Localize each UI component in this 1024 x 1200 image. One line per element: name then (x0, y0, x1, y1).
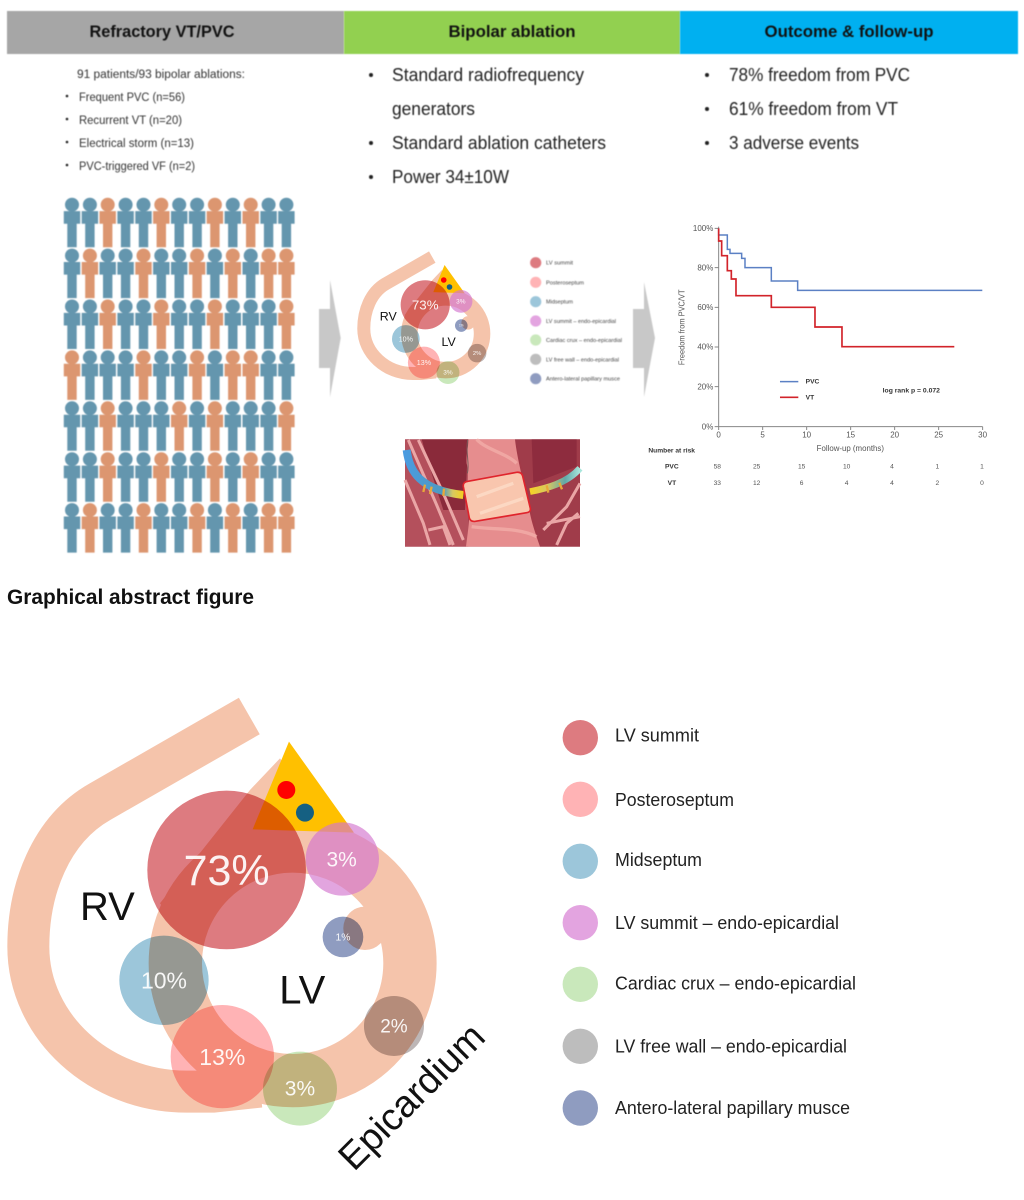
text block: patient population: Frequent PVC (n=56) (79, 92, 185, 104)
large legend: LV summit (615, 726, 699, 746)
header: Refractory VT/PVC (7, 11, 344, 54)
small legend: Cardiac crux – endo-epicardial (546, 338, 622, 344)
Kaplan-Meier chart: Follow-up (months) (817, 444, 884, 453)
text block: ablation details: Standard ablation catheters (392, 133, 606, 153)
Kaplan-Meier chart: VT (806, 395, 814, 402)
Kaplan-Meier chart: 80% (697, 263, 713, 272)
Kaplan-Meier chart: 10 (802, 430, 812, 439)
large legend: Cardiac crux – endo-epicardial (615, 974, 856, 994)
Kaplan-Meier chart: 30 (978, 430, 988, 439)
text block: outcomes (705, 65, 910, 153)
large legend: LV summit – endo-epicardial (615, 913, 839, 933)
small heart diagram: 3% (443, 370, 453, 377)
header: Bipolar ablation (344, 11, 680, 54)
pictogram: 91 patients (64, 198, 295, 553)
text block: ablation details (369, 65, 606, 187)
Kaplan-Meier chart: 12 (753, 480, 761, 487)
text block: patient population: Electrical storm (n=13) (79, 138, 194, 150)
large heart diagram: 10% (141, 967, 187, 993)
Kaplan-Meier chart: 5 (760, 430, 765, 439)
large heart diagram: 3% (285, 1078, 315, 1101)
Kaplan-Meier chart: PVC (665, 464, 679, 471)
large heart diagram: Epicardium (331, 1016, 493, 1179)
Kaplan-Meier chart: 2 (935, 480, 939, 487)
Kaplan-Meier chart: Freedom from PVC/VT (678, 289, 687, 365)
large heart diagram: 73% (184, 847, 270, 895)
arrow: population to ablation (319, 280, 341, 397)
text block: ablation details: Power 34±10W (392, 167, 509, 187)
illustration: bipolar catheters across septum (405, 439, 580, 547)
Kaplan-Meier chart: 0 (716, 430, 721, 439)
Kaplan-Meier chart (648, 224, 988, 487)
Kaplan-Meier chart: PVC (806, 379, 820, 386)
small legend: LV free wall – endo-epicardial (546, 357, 619, 363)
Kaplan-Meier chart: 33 (714, 480, 721, 487)
Kaplan-Meier chart: 4 (890, 480, 894, 487)
Kaplan-Meier chart: 4 (845, 480, 849, 487)
Kaplan-Meier chart: 20 (890, 430, 900, 439)
Kaplan-Meier chart: 25 (753, 464, 761, 471)
text block: patient population: 91 patients/93 bipolar ablations: (77, 69, 245, 81)
text block: ablation details: Standard radiofrequency (392, 65, 584, 85)
large heart diagram: RV (80, 885, 135, 929)
large heart diagram (28, 716, 493, 1179)
small heart diagram: 3% (456, 299, 466, 306)
Kaplan-Meier chart: 100% (693, 224, 713, 233)
header: Bipolar ablation: Bipolar ablation (448, 22, 576, 41)
small heart diagram: 1% (459, 324, 464, 328)
header: Outcome and follow-up (680, 11, 1018, 54)
small heart diagram (364, 257, 486, 384)
text block: patient population: PVC-triggered VF (n=2) (79, 161, 195, 173)
small heart diagram: 10% (399, 335, 414, 343)
small heart diagram: RV (380, 309, 398, 323)
Kaplan-Meier chart: 0% (702, 422, 713, 431)
header: Outcome and follow-up: Outcome & follow-up (764, 22, 934, 41)
small legend: Antero-lateral papillary musce (546, 377, 620, 383)
Kaplan-Meier chart: VT (668, 480, 676, 487)
text block: outcomes: 61% freedom from VT (729, 99, 898, 119)
caption: Graphical abstract figure: Graphical abstract figure (7, 586, 254, 609)
Kaplan-Meier chart: 58 (714, 464, 721, 471)
Kaplan-Meier chart: 15 (846, 430, 856, 439)
header: Refractory VT/PVC: Refractory VT/PVC (90, 22, 234, 41)
large legend: Midseptum (615, 850, 702, 870)
text block: ablation details: generators (392, 99, 475, 119)
large heart diagram: 1% (335, 933, 350, 944)
arrow: ablation to outcome (633, 282, 655, 397)
Kaplan-Meier chart: 15 (798, 464, 806, 471)
large heart diagram: 3% (326, 849, 357, 872)
Kaplan-Meier chart: log rank p = 0.072 (883, 387, 940, 394)
Kaplan-Meier chart: 6 (800, 480, 804, 487)
small legend: Posteroseptum (546, 280, 584, 286)
large legend: LV free wall – endo-epicardial (615, 1036, 847, 1056)
small heart diagram: 2% (473, 351, 482, 357)
large heart diagram: 13% (199, 1044, 245, 1070)
Kaplan-Meier chart: 20% (697, 382, 713, 391)
text block: patient population (66, 69, 245, 173)
Kaplan-Meier chart: 10 (843, 464, 851, 471)
large heart diagram: LV (279, 968, 326, 1012)
Kaplan-Meier chart: 25 (934, 430, 944, 439)
large legend: Posteroseptum (615, 790, 734, 810)
Kaplan-Meier chart: 40% (697, 343, 713, 352)
small legend: LV summit (546, 261, 573, 267)
small legend (530, 257, 622, 384)
text block: outcomes: 78% freedom from PVC (729, 65, 910, 85)
small legend: Midseptum (546, 300, 573, 306)
Kaplan-Meier chart: 60% (697, 303, 713, 312)
large heart diagram: 2% (380, 1016, 408, 1037)
small legend: LV summit – endo-epicardial (546, 319, 616, 325)
small heart diagram: 73% (412, 297, 439, 312)
text block: patient population: Recurrent VT (n=20) (79, 115, 182, 127)
small heart diagram: 13% (417, 359, 432, 367)
Kaplan-Meier chart: 4 (890, 464, 894, 471)
Kaplan-Meier chart: 0 (980, 480, 984, 487)
Kaplan-Meier chart: 1 (980, 464, 984, 471)
large legend (563, 720, 856, 1126)
small heart diagram: LV (442, 335, 457, 349)
text block: outcomes: 3 adverse events (729, 133, 859, 153)
large legend: Antero-lateral papillary musce (615, 1098, 850, 1118)
Kaplan-Meier chart: 1 (935, 464, 939, 471)
Kaplan-Meier chart: Number at risk (648, 448, 695, 455)
